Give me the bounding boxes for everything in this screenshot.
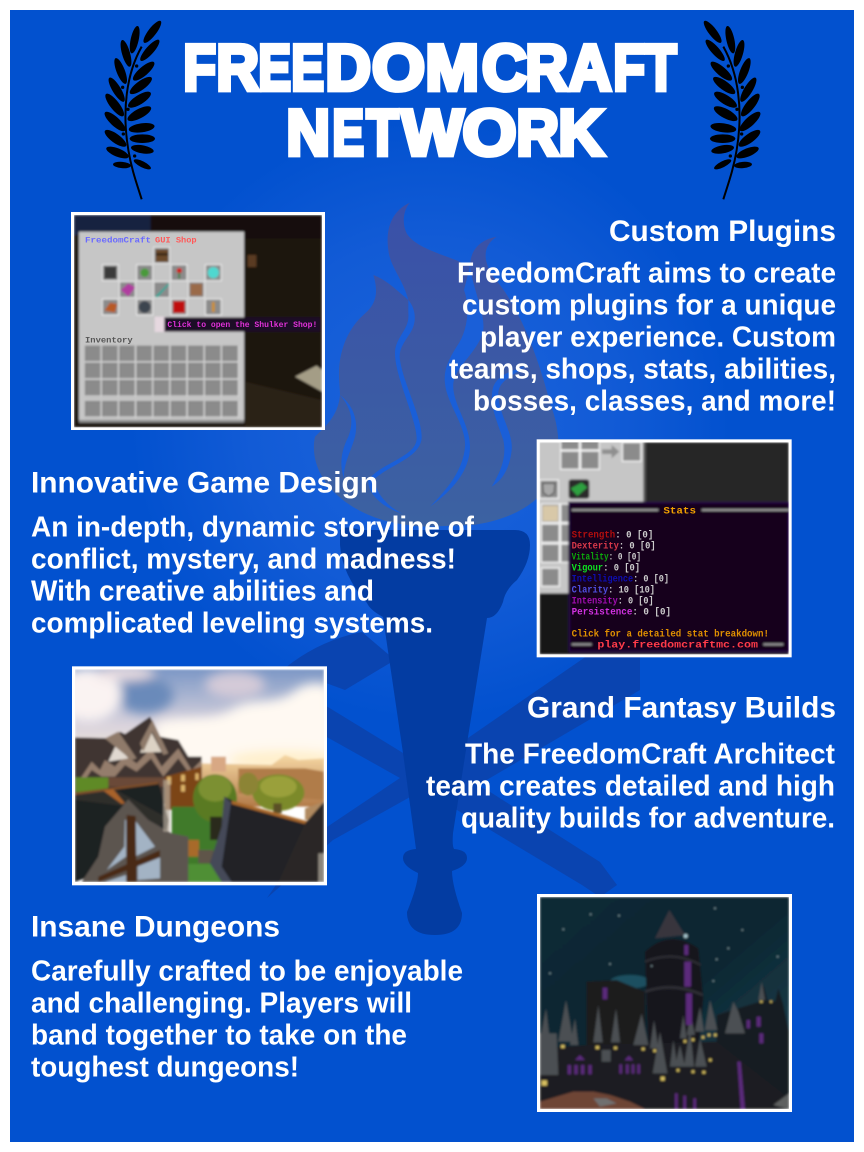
title: O xyxy=(462,96,516,169)
title: K xyxy=(558,96,604,169)
title: W xyxy=(402,96,464,169)
icon: left laurel branch xyxy=(102,19,164,199)
screenshot: stats menu xyxy=(537,439,792,657)
screenshot: stats menu: Vigour: 0 [0] xyxy=(572,562,640,573)
text block: Custom Plugins: player experience. Custom xyxy=(480,322,836,354)
title: T xyxy=(646,31,676,104)
screenshot: stats menu: Strength: 0 [0] xyxy=(572,529,653,540)
title: E xyxy=(258,31,291,104)
text block: Grand Fantasy Builds xyxy=(426,692,836,834)
icon: right laurel branch xyxy=(701,19,763,199)
text block: Insane Dungeons: Carefully crafted to be enjoyable xyxy=(31,956,463,988)
text block: Grand Fantasy Builds: team creates detailed and high xyxy=(426,770,835,802)
title: O xyxy=(372,31,425,104)
text block: Innovative Game Design xyxy=(31,466,474,640)
emblem: crossed bars xyxy=(267,632,640,898)
text block: Custom Plugins: bosses, classes, and more! xyxy=(473,386,836,418)
title: C xyxy=(482,31,527,104)
screenshot: stats menu: play.freedomcraftmc.com xyxy=(597,639,758,650)
title: F xyxy=(183,31,216,104)
text block: Custom Plugins: FreedomCraft aims to create xyxy=(457,258,836,290)
title: R xyxy=(516,96,559,169)
screenshot: stats menu: Persistence: 0 [0] xyxy=(572,606,671,617)
screenshot: GUI shop: GUI Shop xyxy=(155,236,197,246)
screenshot: stats menu: Click for a detailed stat breakdown! xyxy=(572,628,769,639)
text block: Grand Fantasy Builds: quality builds for adventure. xyxy=(461,802,835,834)
text block: Insane Dungeons: and challenging. Players will xyxy=(31,988,412,1020)
title: N xyxy=(286,96,330,169)
screenshot: stats menu: Vitality: 0 [0] xyxy=(572,551,641,562)
text block: Insane Dungeons: Insane Dungeons xyxy=(31,910,280,944)
text block: Insane Dungeons: toughest dungeons! xyxy=(31,1052,299,1084)
title: D xyxy=(325,31,371,104)
text block: Custom Plugins: custom plugins for a unique xyxy=(462,290,836,322)
screenshot: GUI shop: Inventory xyxy=(85,335,133,345)
screenshot: stats menu: Clarity: 10 [10] xyxy=(572,584,655,595)
title: E xyxy=(291,31,324,104)
text block: Custom Plugins: Custom Plugins xyxy=(609,215,836,248)
title: F xyxy=(613,31,645,104)
text block: Custom Plugins xyxy=(449,215,836,418)
text block: Grand Fantasy Builds: The FreedomCraft Architect xyxy=(465,738,836,770)
screenshot: dark castle dungeon xyxy=(537,894,792,1112)
screenshot: GUI shop: Click to open the Shulker Shop! xyxy=(167,320,317,330)
title: R xyxy=(216,31,259,104)
title: A xyxy=(568,31,612,104)
screenshot: GUI shop: FreedomCraft xyxy=(85,236,151,246)
text block: Insane Dungeons: band together to take on the xyxy=(31,1020,407,1052)
title: T xyxy=(366,96,398,169)
screenshot: stats menu: Intelligence: 0 [0] xyxy=(572,573,669,584)
text block: Insane Dungeons xyxy=(31,910,463,1084)
screenshot: stats menu: Intensity: 0 [0] xyxy=(572,595,654,606)
title: E xyxy=(332,96,364,169)
text block: Innovative Game Design: Innovative Game Design xyxy=(31,466,378,500)
screenshot: GUI shop xyxy=(71,212,325,430)
text block: Custom Plugins: teams, shops, stats, abilities, xyxy=(449,354,836,386)
text block: Innovative Game Design: An in-depth, dynamic storyline of xyxy=(31,512,474,544)
screenshot: stats menu: Dexterity: 0 [0] xyxy=(572,540,656,551)
title xyxy=(183,31,676,169)
screenshot: stats menu: Stats xyxy=(663,505,696,516)
emblem: torch handle xyxy=(340,528,530,935)
title: M xyxy=(425,31,479,104)
text block: Innovative Game Design: conflict, mystery, and madness! xyxy=(31,544,456,576)
background emblem: flaming torch xyxy=(267,203,640,935)
emblem: flame xyxy=(314,203,559,527)
title: R xyxy=(525,31,568,104)
text block: Grand Fantasy Builds: Grand Fantasy Builds xyxy=(527,692,836,724)
text block: Innovative Game Design: With creative abilities and xyxy=(31,576,374,608)
screenshot: grand fantasy town xyxy=(72,666,327,886)
text block: Innovative Game Design: complicated leveling systems. xyxy=(31,608,433,640)
